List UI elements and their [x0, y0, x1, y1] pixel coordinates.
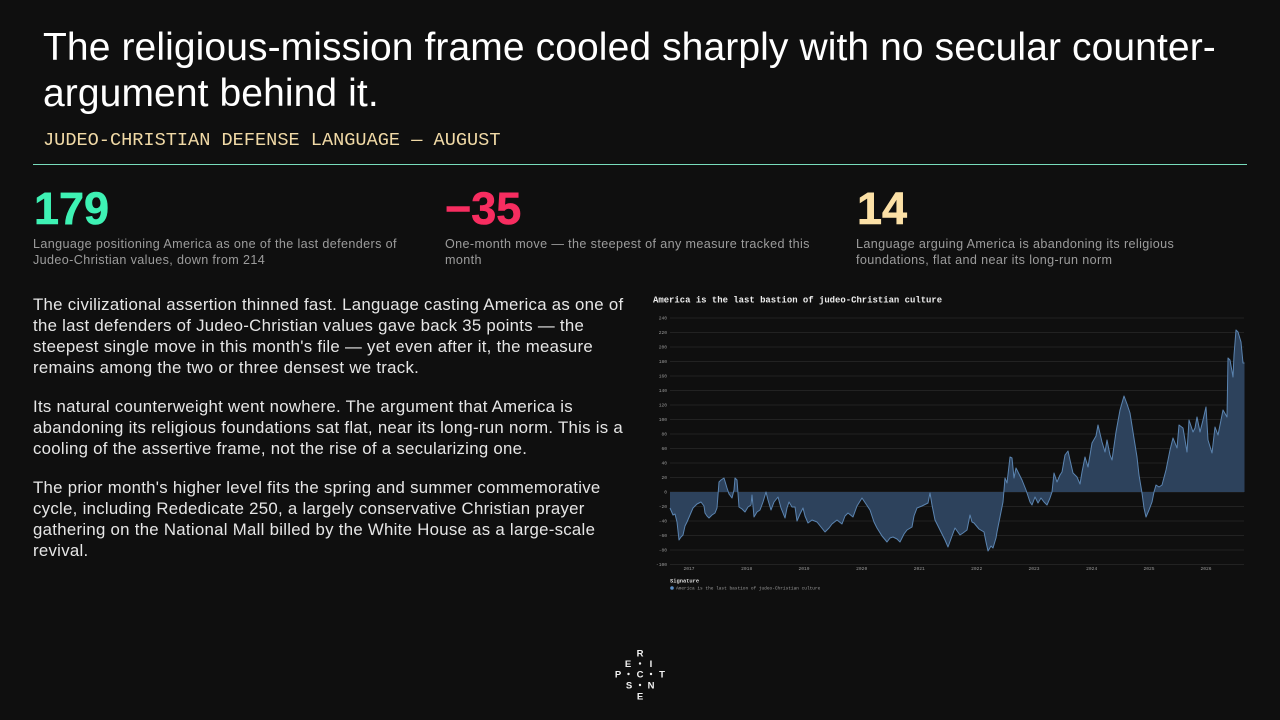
body paragraph 3: cycle, including Rededicate 250, a largely conservative Christian prayer: [33, 499, 585, 518]
body paragraph 1: The civilizational assertion thinned fast. Language casting America as one of: [33, 295, 623, 314]
logo: I: [650, 659, 652, 670]
logo: T: [659, 670, 665, 680]
x axis labels: 2019: [798, 566, 810, 572]
body paragraph 3: revival.: [33, 541, 88, 560]
subtitle: JUDEO-CHRISTIAN DEFENSE LANGUAGE — AUGUST: [43, 130, 500, 151]
stat caption: [856, 237, 1174, 267]
legend: America is the last bastion of judeo-Christian culture: [676, 586, 821, 592]
body paragraph 3: The prior month's higher level fits the spring and summer commemorative: [33, 478, 601, 497]
stat caption: Language positioning America as one of the last defenders of: [33, 237, 397, 251]
stat caption: foundations, flat and near its long-run norm: [856, 253, 1112, 267]
legend: [670, 578, 821, 592]
title: The religious-mission frame cooled sharply with no secular counter-: [43, 26, 1216, 69]
body paragraph 3: [33, 478, 601, 560]
area chart: [653, 296, 1244, 592]
x axis labels: 2018: [741, 566, 752, 572]
body paragraph 3: gathering on the National Mall billed by the White House as a large-scale: [33, 520, 595, 539]
x axis labels: 2017: [683, 566, 695, 572]
logo: P: [615, 670, 622, 680]
y axis labels: 20: [661, 475, 667, 481]
y axis labels: 240: [659, 316, 667, 322]
stat caption: Judeo-Christian values, down from 214: [33, 253, 265, 267]
y axis labels: -100: [656, 562, 667, 568]
stat value: 14: [857, 183, 907, 234]
y axis labels: 220: [659, 330, 667, 336]
body paragraph 2: abandoning its religious foundations sat flat, near its long-run norm. This is a: [33, 418, 623, 437]
y axis labels: 160: [659, 374, 667, 380]
data series area: [670, 330, 1244, 551]
stat: -35: [445, 183, 810, 267]
body paragraph 1: [33, 295, 624, 377]
x axis labels: 2021: [914, 566, 925, 572]
logo: E: [637, 692, 643, 702]
y axis labels: 200: [659, 344, 667, 350]
y axis labels: 40: [661, 460, 667, 466]
y axis labels: -20: [659, 504, 667, 510]
stat: 14: [856, 183, 1174, 267]
stat caption: [33, 237, 397, 267]
title: [43, 26, 1216, 115]
y axis labels: -80: [659, 548, 667, 554]
x axis labels: 2025: [1143, 566, 1155, 572]
y axis labels: 0: [664, 490, 667, 496]
stat value: 179: [34, 183, 109, 234]
x axis labels: 2020: [856, 566, 867, 572]
y axis labels: 120: [659, 402, 667, 408]
stat caption: Language arguing America is abandoning its religious: [856, 237, 1174, 251]
y axis labels: 140: [659, 388, 667, 394]
x axis labels: 2023: [1028, 566, 1040, 572]
title: argument behind it.: [43, 72, 379, 115]
body paragraph 2: cooling of the assertive frame, not the rise of a secularizing one.: [33, 439, 527, 458]
stat caption: month: [445, 253, 482, 267]
stat caption: One-month move — the steepest of any measure tracked this: [445, 237, 810, 251]
y axis labels: -40: [659, 518, 667, 524]
logo: R: [637, 648, 644, 660]
y axis labels: -60: [659, 533, 667, 539]
body paragraph 1: steepest single move in this month's file — yet even after it, the measure: [33, 337, 593, 356]
logo: [615, 648, 665, 702]
y axis labels: 100: [659, 417, 667, 423]
legend: Signature: [670, 578, 699, 584]
body paragraph 2: Its natural counterweight went nowhere. The argument that America is: [33, 397, 573, 416]
logo: E: [625, 659, 631, 670]
logo: S: [626, 680, 632, 692]
body paragraph 1: the last defenders of Judeo-Christian values gave back 35 points — the: [33, 316, 584, 335]
stat value: −35: [445, 183, 521, 234]
y axis labels: 80: [661, 432, 667, 438]
x axis labels: 2024: [1086, 566, 1097, 572]
x axis labels: [683, 566, 1212, 572]
y axis labels: [656, 316, 667, 568]
chart title: America is the last bastion of judeo-Christian culture: [653, 296, 942, 306]
logo: N: [648, 680, 655, 692]
y axis labels: 180: [659, 359, 667, 365]
x axis labels: 2022: [971, 566, 982, 572]
body paragraph 2: [33, 397, 623, 458]
stat caption: [445, 237, 810, 267]
logo: C: [637, 670, 644, 680]
x axis labels: 2026: [1200, 566, 1212, 572]
stat: 179: [33, 183, 397, 267]
y axis labels: 60: [661, 446, 667, 452]
body paragraph 1: remains among the two or three densest we track.: [33, 358, 419, 377]
